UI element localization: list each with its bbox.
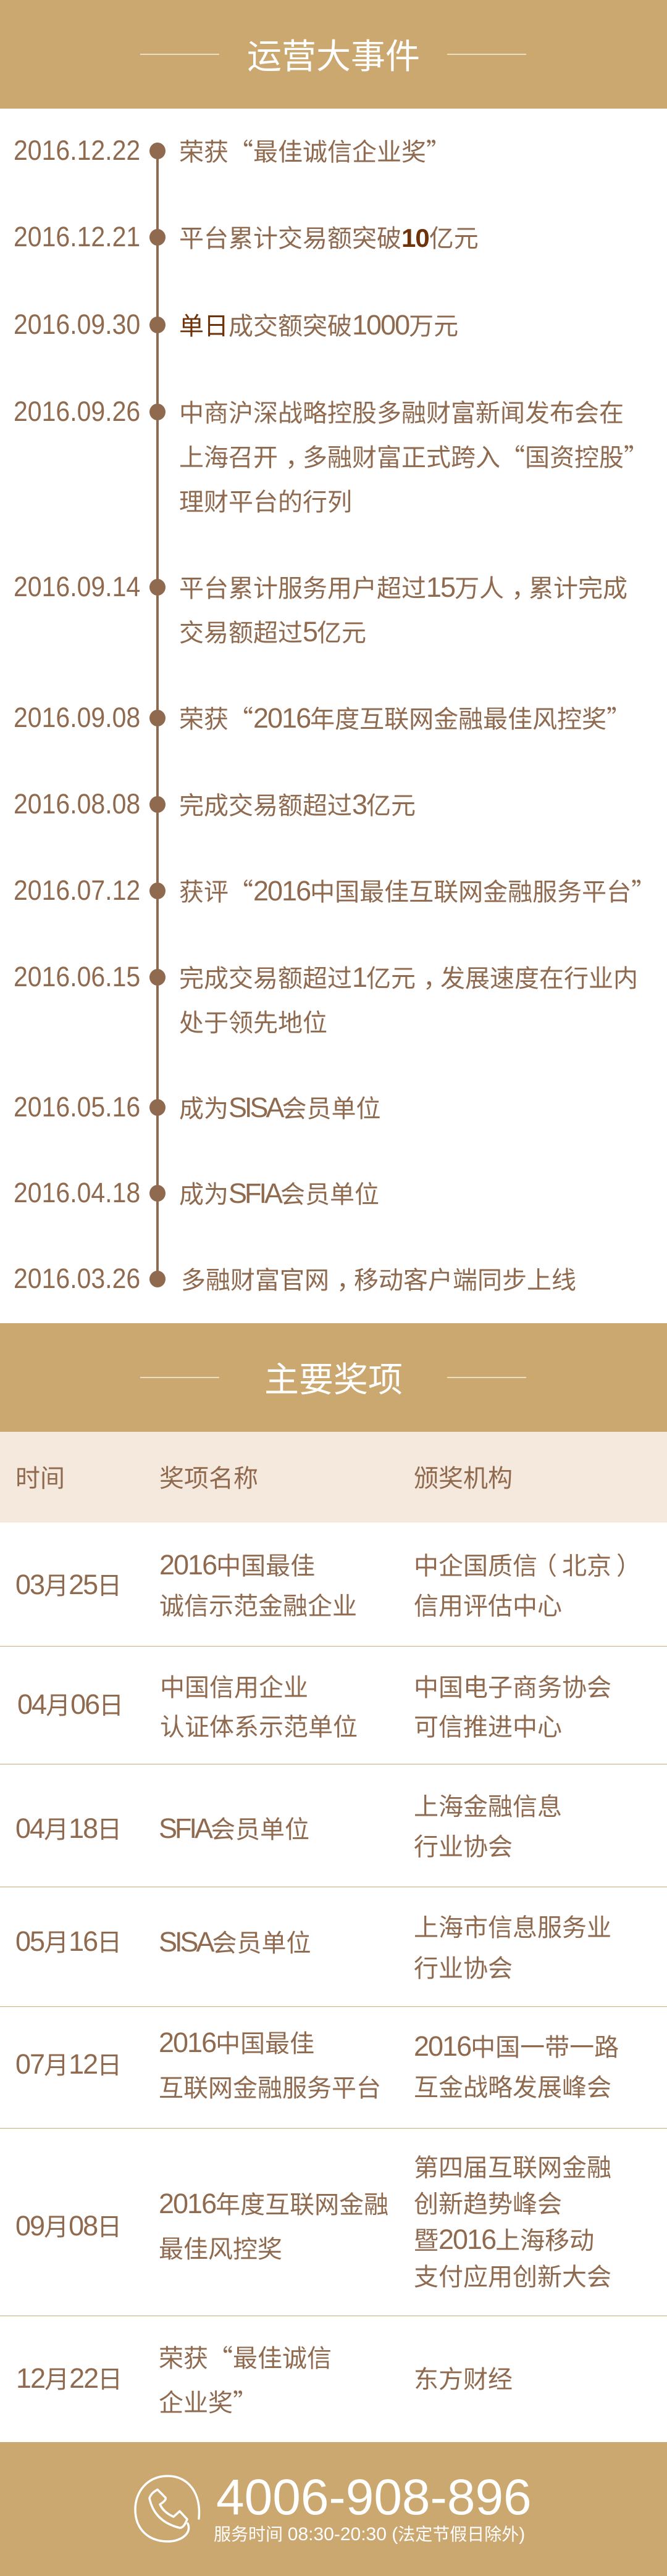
- award row 07月12日: 2016中国最佳: [159, 2027, 314, 2058]
- event 2016.12.22: [14, 132, 451, 168]
- award row 04月18日: 上海金融信息: [414, 1793, 562, 1821]
- event 2016.09.26: 上海召开 ，多融财富正式跨入“国资控股”: [179, 438, 648, 473]
- award row 03月25日: 中企国质信（北京）: [414, 1553, 641, 1580]
- column: 颁奖机构: 颁奖机构: [414, 1465, 513, 1492]
- award row 05月16日: SISA会员单位: [159, 1926, 311, 1958]
- award row 04月18日: SFIA会员单位: [159, 1813, 309, 1844]
- event 2016.12.22: 荣获“最佳诚信企业奖”: [179, 132, 451, 168]
- award row 12月22日: 12月22日: [16, 2362, 122, 2394]
- event 2016.03.26: 2016.03.26: [14, 1263, 140, 1294]
- event 2016.09.30: 2016.09.30: [14, 309, 140, 340]
- award row 04月06日: 可信推进中心: [414, 1714, 562, 1741]
- event 2016.09.14: 平台累计服务用户超过15万人 ，累计完成: [179, 568, 627, 604]
- event 2016.08.08: [14, 788, 416, 820]
- award row 07月12日: [0, 2006, 667, 2129]
- event 2016.09.14: 2016.09.14: [14, 571, 140, 602]
- event 2016.09.14: [14, 568, 627, 647]
- award row 09月08日: 最佳风控奖: [159, 2236, 282, 2263]
- award row 09月08日: 创新趋势峰会: [414, 2191, 562, 2218]
- heading: 主要奖项: [264, 1352, 403, 1402]
- award row 03月25日: 诚信示范金融企业: [159, 1593, 357, 1620]
- event 2016.04.18: 2016.04.18: [14, 1177, 140, 1208]
- award row 04月06日: 中国电子商务协会: [414, 1674, 611, 1701]
- column: 奖项名称: 奖项名称: [159, 1465, 258, 1492]
- award row 07月12日: 2016中国一带一路: [414, 2030, 619, 2062]
- event 2016.09.26: 理财平台的行列: [179, 489, 352, 516]
- event 2016.05.16: [14, 1091, 381, 1123]
- award row 04月18日: 04月18日: [15, 1813, 122, 1844]
- event 2016.09.08: 荣获“2016年度互联网金融最佳风控奖”: [179, 699, 631, 735]
- footer band: [0, 2442, 667, 2576]
- award row 12月22日: 企业奖”: [159, 2383, 258, 2419]
- event 2016.09.08: 2016.09.08: [14, 702, 140, 733]
- award row 12月22日: [16, 2338, 513, 2419]
- event 2016.09.14: 交易额超过5亿元: [179, 616, 366, 647]
- section header: 主要奖项: [0, 1323, 667, 1432]
- award row 05月16日: [0, 1887, 667, 2007]
- award row 07月12日: 07月12日: [15, 2048, 122, 2080]
- award row 12月22日: 荣获“最佳诚信: [159, 2338, 332, 2374]
- award row 09月08日: [0, 2128, 667, 2316]
- event 2016.06.15: [14, 958, 638, 1037]
- event 2016.09.30: [14, 309, 458, 341]
- event 2016.09.30: 单日成交额突破1000万元: [179, 309, 458, 341]
- event 2016.08.08: 完成交易额超过3亿元: [179, 789, 416, 820]
- event 2016.07.12: 2016.07.12: [14, 875, 140, 906]
- section header: 运营大事件: [0, 0, 667, 109]
- award row 07月12日: 互金战略发展峰会: [414, 2074, 611, 2101]
- event 2016.09.26: 中商沪深战略控股多融财富新闻发布会在: [179, 400, 624, 427]
- event 2016.06.15: 处于领先地位: [179, 1010, 327, 1037]
- award row 09月08日: 支付应用创新大会: [414, 2264, 611, 2291]
- event 2016.03.26: 多融财富官网 ，移动客户端同步上线: [181, 1260, 576, 1296]
- award row 03月25日: 信用评估中心: [414, 1593, 562, 1620]
- award row 09月08日: 第四届互联网金融: [414, 2154, 611, 2182]
- award row 03月25日: [0, 1523, 667, 1647]
- award row 07月12日: 互联网金融服务平台: [159, 2075, 381, 2102]
- heading: 运营大事件: [247, 29, 420, 79]
- table header row: [0, 1432, 667, 1523]
- award row 12月22日: 东方财经: [414, 2366, 513, 2393]
- award row 04月06日: 04月06日: [17, 1689, 124, 1720]
- award row 04月06日: 认证体系示范单位: [160, 1714, 358, 1741]
- event 2016.04.18: [14, 1177, 379, 1209]
- award row 09月08日: 2016年度互联网金融: [159, 2188, 388, 2219]
- event 2016.07.12: 获评“2016中国最佳互联网金融服务平台”: [179, 872, 656, 908]
- event 2016.12.21: 2016.12.21: [14, 221, 140, 252]
- timeline panel: [14, 132, 656, 1296]
- award row 05月16日: 05月16日: [15, 1926, 122, 1957]
- award row 09月08日: 暨2016上海移动: [414, 2224, 594, 2255]
- event 2016.12.22: 2016.12.22: [14, 135, 140, 166]
- award row 04月06日: 中国信用企业: [160, 1674, 308, 1701]
- event 2016.08.08: 2016.08.08: [14, 788, 140, 820]
- event 2016.12.21: 平台累计交易额突破10亿元: [179, 223, 479, 252]
- event 2016.06.15: 完成交易额超过1亿元 ，发展速度在行业内: [179, 958, 638, 994]
- award row 04月06日: [0, 1646, 667, 1764]
- event 2016.05.16: 2016.05.16: [14, 1091, 140, 1123]
- award row 03月25日: 2016中国最佳: [159, 1549, 315, 1581]
- event 2016.12.21: [14, 221, 479, 252]
- event 2016.06.15: 2016.06.15: [14, 961, 140, 992]
- column: 时间: 时间: [15, 1465, 65, 1492]
- icon: phone: [134, 2475, 200, 2543]
- award row 04月18日: 行业协会: [414, 1834, 513, 1861]
- award row 03月25日: 03月25日: [15, 1569, 122, 1600]
- service hours: 服务时间 08:30-20:30 (法定节假日除外): [214, 2524, 525, 2545]
- award row 04月18日: [0, 1764, 667, 1887]
- award row 09月08日: 09月08日: [15, 2210, 122, 2242]
- phone number: 4006-908-896: [216, 2469, 532, 2525]
- award row 05月16日: 上海市信息服务业: [414, 1914, 611, 1942]
- event 2016.09.26: 2016.09.26: [14, 396, 140, 427]
- award row 05月16日: 行业协会: [414, 1955, 513, 1982]
- event 2016.09.26: [14, 396, 648, 516]
- event 2016.04.18: 成为SFIA会员单位: [179, 1178, 379, 1209]
- event 2016.05.16: 成为SISA会员单位: [179, 1092, 381, 1123]
